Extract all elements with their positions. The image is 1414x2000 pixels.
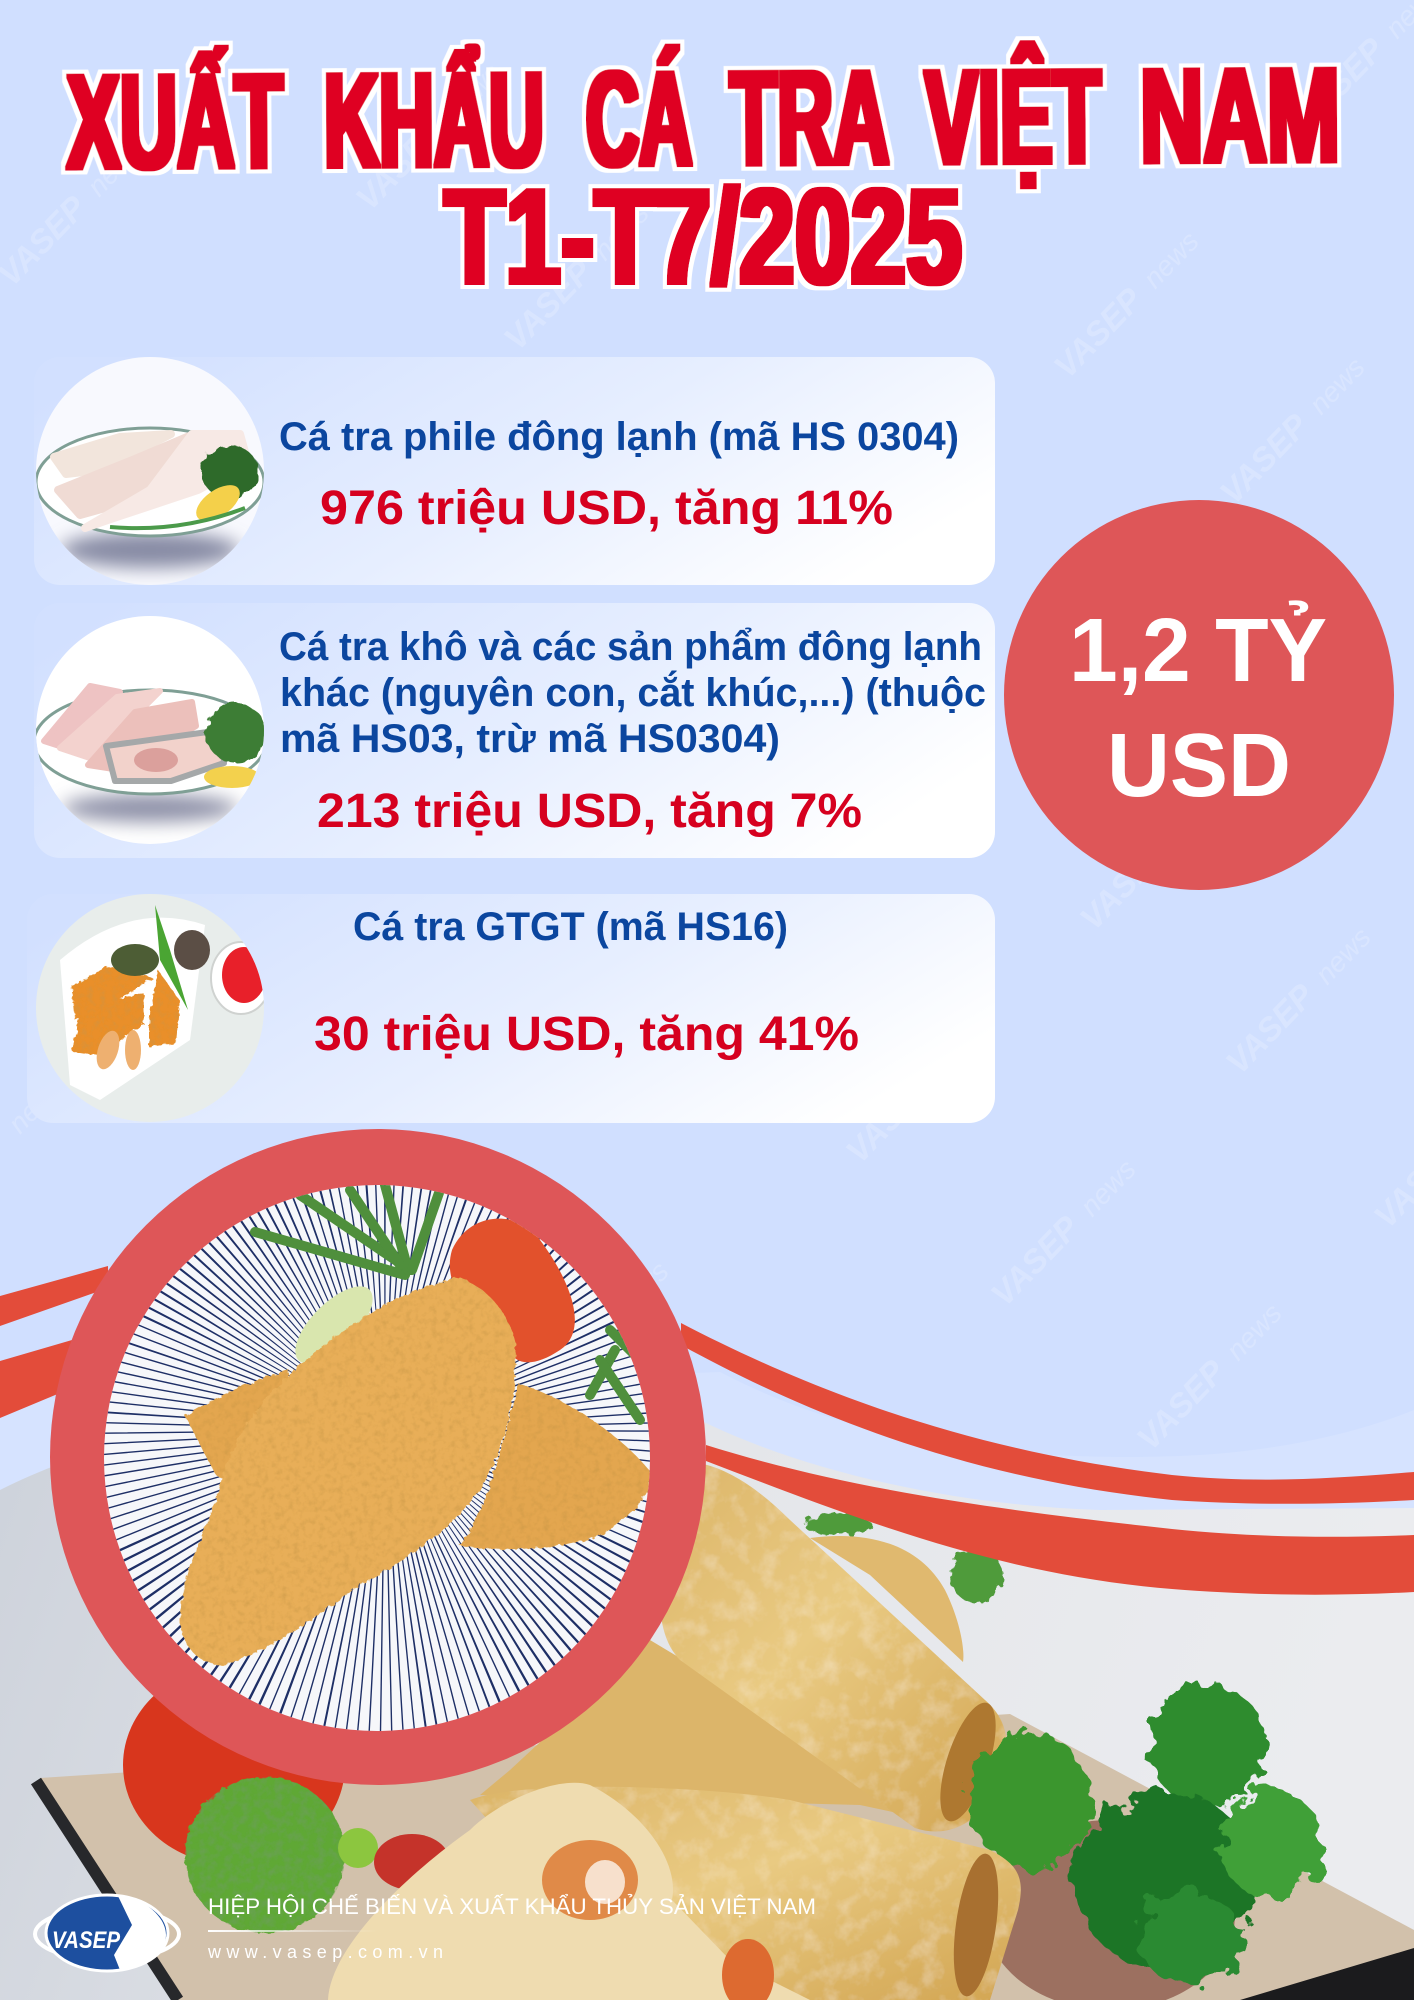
- callout: total value: [1004, 500, 1394, 890]
- title line 2: T1-T7/2025: [444, 161, 962, 312]
- back roll: [810, 1536, 963, 1662]
- label: Cá tra GTGT (mã HS16): [353, 905, 788, 949]
- label: Cá tra phile đông lạnh (mã HS 0304): [279, 415, 959, 459]
- logo: VASEP: [35, 1895, 179, 1971]
- pea and red garnish: [338, 1828, 450, 1890]
- footer: [35, 1894, 816, 1971]
- callout: total value: USD: [1107, 716, 1291, 816]
- organisation name: HIỆP HỘI CHẾ BIẾN VÀ XUẤT KHẨU THỦY SẢN VIỆT NAM: [208, 1894, 816, 1919]
- label: mã HS03, trừ mã HS0304): [280, 717, 780, 761]
- title line 1: TRA: [730, 42, 889, 194]
- divider: [208, 1930, 378, 1932]
- side fillet: [185, 1370, 290, 1490]
- table surface: [0, 1410, 1414, 2000]
- watermarks: VASEP news: [1129, 1294, 1289, 1457]
- title: [67, 39, 1340, 312]
- value: 213 triệu USD, tăng 7%: [317, 785, 862, 838]
- watermarks: VASEP news: [496, 194, 656, 357]
- watermarks: VASEP news: [838, 1007, 998, 1170]
- watermarks: VASEP news: [983, 1150, 1143, 1313]
- value: 976 triệu USD, tăng 11%: [320, 482, 893, 535]
- main fillet: [180, 1277, 516, 1665]
- panel: dried and other frozen: [34, 603, 995, 858]
- opened roll with shrimp: [328, 1783, 810, 2000]
- green leaves behind rolls: [804, 1515, 1002, 1603]
- decorative red waves: [0, 1266, 1414, 1595]
- logo: VASEP: VASEP: [52, 1927, 121, 1954]
- thin wave: [0, 1266, 1414, 1504]
- panel: value-added: [27, 894, 995, 1123]
- main roll: [660, 1464, 1007, 1831]
- rear fillet: [460, 1383, 650, 1549]
- lighter background wave: [0, 1372, 1414, 1530]
- watermarks: VASEP news: [1218, 918, 1378, 1081]
- title line 1: CÁ: [586, 43, 692, 195]
- tomato: [123, 1665, 345, 1865]
- watermarks: [0, 0, 1414, 1457]
- callout: total value: 1,2 TỶ: [1069, 600, 1327, 701]
- photo: fish steaks: [34, 616, 266, 844]
- watermarks: VASEP news: [1212, 348, 1372, 511]
- broccoli: [185, 1777, 345, 1933]
- label: khác (nguyên con, cắt khúc,...) (thuộc: [280, 669, 986, 715]
- watermarks: news: [607, 1256, 675, 1324]
- watermarks: VASEP news: [348, 54, 508, 217]
- watermarks: VASEP news: [1046, 222, 1206, 385]
- title line 1: [67, 39, 1340, 198]
- radial plate pattern: [215, 1260, 555, 1600]
- garnish leaves: [111, 905, 210, 1010]
- photo circle: breaded pangasius: [50, 1129, 706, 1785]
- website: www.vasep.com.vn: [207, 1942, 443, 1962]
- watermarks: news: [2, 1071, 70, 1139]
- photo: table with spring rolls: [0, 1410, 1414, 2000]
- watermarks: VASEP news: [1072, 774, 1232, 937]
- photo: fillet plate: [36, 357, 264, 585]
- middle roll: [480, 1640, 930, 1820]
- label: [279, 625, 986, 761]
- title line 1: KHẨU: [324, 44, 544, 196]
- tomato rose: [450, 1219, 575, 1362]
- title line 1: XUẤT: [67, 45, 283, 198]
- lime: [283, 1274, 385, 1376]
- value: 30 triệu USD, tăng 41%: [314, 1008, 859, 1061]
- lower roll: [470, 1787, 1021, 2000]
- thick wave: [0, 1340, 1414, 1595]
- parsley: [968, 1684, 1322, 1984]
- photo: breaded fish: [36, 894, 271, 1123]
- plate: [36, 1714, 1414, 2000]
- title line 1: VIỆT: [925, 41, 1101, 193]
- label: Cá tra khô và các sản phẩm đông lạnh: [279, 625, 982, 669]
- panel: frozen fillet: [34, 357, 995, 585]
- rosemary: [255, 1185, 650, 1420]
